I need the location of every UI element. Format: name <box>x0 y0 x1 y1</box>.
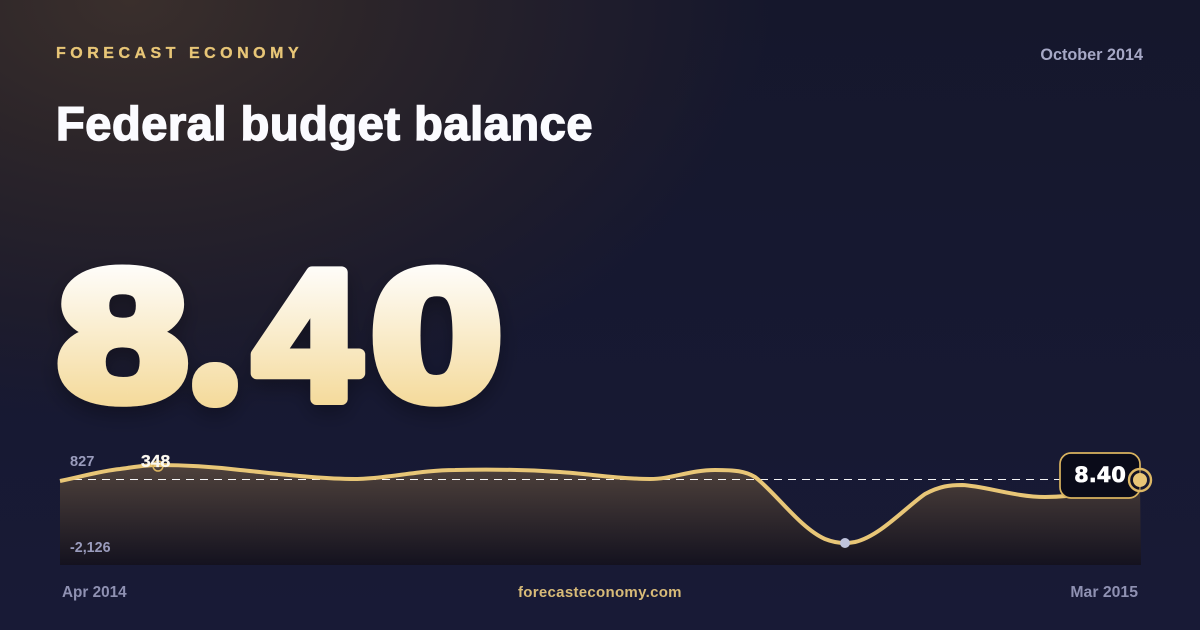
title: Federal budget balance <box>56 97 593 150</box>
low marker <box>840 538 850 548</box>
axis maximum: 827 <box>70 454 94 470</box>
current marker <box>1129 469 1151 491</box>
site url: forecasteconomy.com <box>518 584 682 601</box>
date: October 2014 <box>1040 46 1143 64</box>
big number: . <box>212 369 218 391</box>
axis minimum: -2,126 <box>70 540 111 556</box>
eyebrow: brand name: FORECAST ECONOMY <box>56 45 303 62</box>
line series <box>60 465 1140 543</box>
big number: 8 <box>58 233 188 438</box>
big number: 4 <box>254 232 360 438</box>
big number: 0 <box>371 232 502 438</box>
reference line <box>60 478 1140 480</box>
peak label: 348 <box>141 451 170 471</box>
peak marker <box>153 461 163 471</box>
area fill <box>60 465 1141 565</box>
end date: Mar 2015 <box>1070 584 1138 601</box>
big number <box>58 232 502 438</box>
value tag: 8.40 <box>1074 463 1126 487</box>
value tag <box>1060 453 1140 498</box>
start date: Apr 2014 <box>62 584 127 601</box>
